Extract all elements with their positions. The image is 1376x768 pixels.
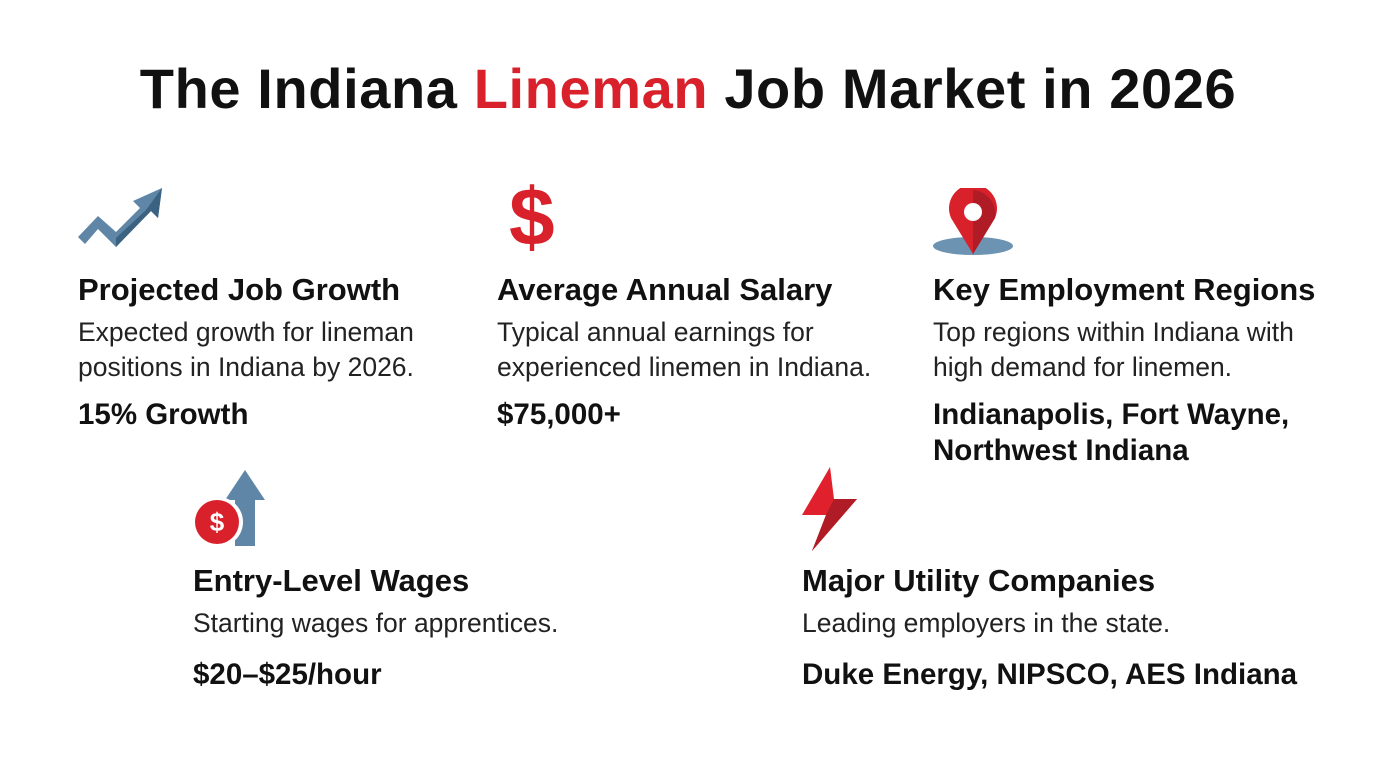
heading: Major Utility Companies (802, 563, 1155, 598)
icon: coin with arrow: $ (210, 507, 225, 537)
body text: Top regions within Indiana with (933, 317, 1294, 347)
value: Indianapolis, Fort Wayne, (933, 398, 1289, 431)
value: 15% Growth (78, 398, 248, 431)
title: The Indiana Lineman Job Market in 2026 (140, 57, 1236, 120)
value: $20–$25/hour (193, 658, 382, 691)
panel: key employment regions (933, 188, 1315, 467)
body text: Expected growth for lineman (78, 317, 414, 347)
icon: map pin (933, 188, 1013, 255)
value: Duke Energy, NIPSCO, AES Indiana (802, 658, 1297, 691)
value: $75,000+ (497, 398, 621, 431)
icon: trend arrow (78, 188, 162, 247)
heading: Key Employment Regions (933, 272, 1315, 307)
heading: Entry-Level Wages (193, 563, 469, 598)
value: Northwest Indiana (933, 434, 1189, 467)
panel: average annual salary (497, 172, 871, 431)
icon: lightning bolt (802, 467, 857, 551)
body text: experienced linemen in Indiana. (497, 352, 871, 382)
body text (497, 317, 871, 382)
value (933, 398, 1289, 467)
body text (933, 317, 1294, 382)
icon: dollar: $ (509, 172, 555, 263)
body text (78, 317, 414, 382)
heading: Average Annual Salary (497, 272, 832, 307)
body text: Typical annual earnings for (497, 317, 814, 347)
panel: projected job growth (78, 188, 414, 431)
icon: coin with arrow (195, 470, 265, 546)
body text: high demand for linemen. (933, 352, 1232, 382)
body text: Starting wages for apprentices. (193, 608, 558, 638)
heading: Projected Job Growth (78, 272, 400, 307)
panel: entry-level wages (193, 470, 558, 691)
body text: Leading employers in the state. (802, 608, 1170, 638)
body text: positions in Indiana by 2026. (78, 352, 414, 382)
panel: major utility companies (802, 467, 1298, 691)
